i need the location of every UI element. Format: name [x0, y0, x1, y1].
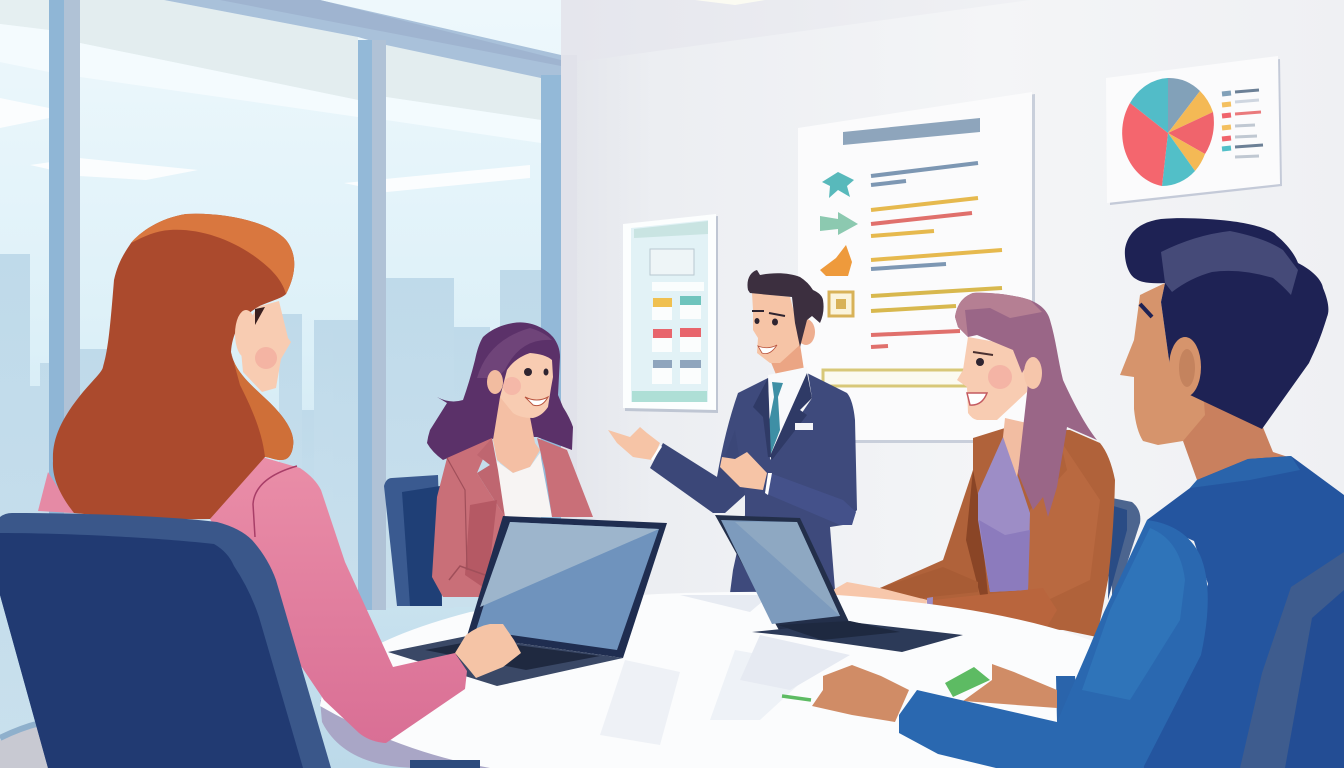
face: [957, 337, 1030, 420]
eyelash: [255, 307, 265, 325]
person: presenter in suit: [608, 270, 857, 593]
pie legend: [1222, 90, 1263, 157]
collar: [1190, 456, 1300, 488]
chair right of woman with mauve hair: [1108, 498, 1140, 610]
conference table: [320, 592, 1178, 768]
hair: [427, 322, 573, 460]
board bars: [871, 163, 1002, 347]
ear: [797, 319, 815, 345]
shirt body: [1143, 456, 1344, 768]
back wall: [561, 0, 1344, 768]
inner arm cuff: [1056, 676, 1078, 722]
blazer: [432, 438, 505, 597]
ceiling: [320, 0, 1030, 62]
skyline: [0, 254, 542, 768]
lapels: [753, 378, 771, 457]
suit body: [717, 373, 857, 593]
window with skyline: [0, 0, 561, 768]
green pencil: [782, 696, 811, 700]
neck: [1003, 418, 1027, 477]
ear: [1169, 337, 1201, 397]
face details: [752, 311, 785, 326]
cuff: [927, 597, 933, 625]
center laptop: [715, 515, 963, 652]
head: [752, 293, 802, 363]
eyebrow: [1140, 304, 1152, 317]
top: [495, 453, 552, 517]
table reflections: [600, 660, 680, 745]
left laptop: [388, 516, 667, 686]
hands: [812, 665, 909, 722]
ear: [487, 370, 503, 394]
name badge: [795, 423, 813, 430]
person: man in blue shirt, foreground right: [782, 218, 1344, 768]
neck: [493, 397, 540, 473]
face: [1120, 283, 1205, 445]
face: [240, 301, 291, 392]
hand: [455, 624, 521, 678]
hand on chest: [720, 452, 767, 490]
left shoulder: [38, 472, 74, 513]
wall poster: pie chart: [1106, 56, 1282, 205]
wall poster: large chart board: [798, 92, 1035, 443]
person: woman with purple hair and rose blazer: [427, 322, 593, 597]
sleeve: [899, 520, 1208, 768]
neck: [770, 344, 804, 384]
hands: [833, 582, 927, 620]
pie chart: [1122, 78, 1214, 186]
raised arm: [650, 430, 745, 513]
hair: [955, 293, 1097, 517]
ear: [1024, 357, 1042, 389]
forearm: [767, 473, 856, 525]
neck: [1183, 395, 1294, 480]
front right chair: [1240, 552, 1344, 768]
chair behind woman in blazer: [384, 475, 442, 606]
window frame: [49, 0, 577, 768]
board highlighted box: [823, 370, 968, 386]
forearm and sleeve: [933, 588, 1057, 627]
shirt and tie: [768, 367, 812, 460]
face: [500, 353, 553, 418]
pink sweater: [210, 457, 467, 743]
board title bar: [843, 118, 980, 145]
front left chair: [0, 513, 331, 768]
green pad: [945, 667, 990, 697]
hair: [53, 214, 294, 519]
board icons: [820, 172, 858, 316]
top: [978, 437, 1030, 592]
person: woman with auburn hair, back view: [38, 214, 521, 743]
upper glass reflections: [0, 0, 541, 192]
person: woman with mauve hair and brown blazer: [833, 293, 1115, 637]
ear: [235, 310, 257, 358]
wall poster: small document: [623, 214, 718, 413]
raised hand: [608, 427, 660, 460]
blazer: [880, 428, 1115, 637]
floor strip: [0, 722, 50, 768]
hair: [1125, 218, 1328, 429]
hair: [747, 270, 824, 347]
